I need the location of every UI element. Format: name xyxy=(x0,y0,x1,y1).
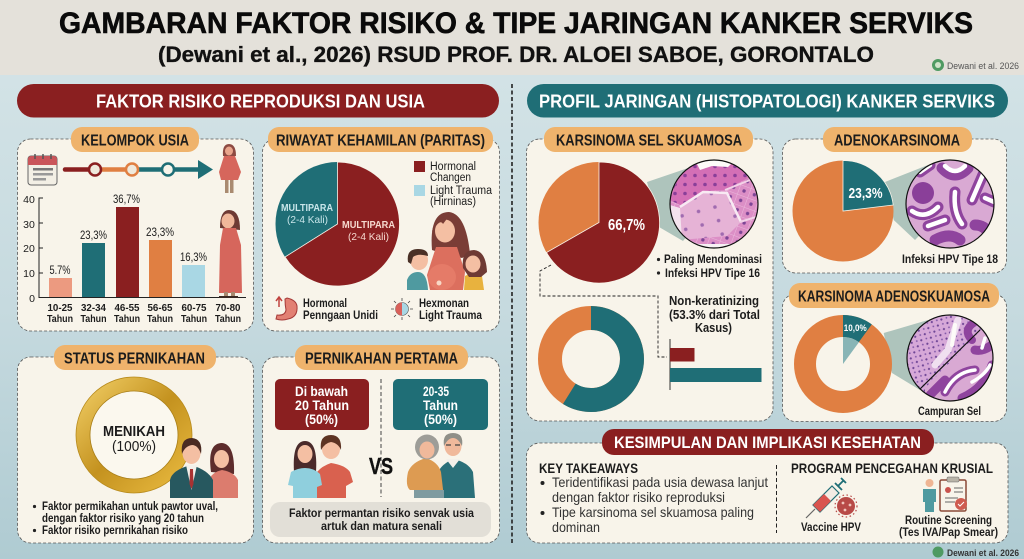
callout wedge xyxy=(885,165,950,240)
bar chart: age groups xyxy=(23,194,246,325)
box: under 20: Di bawah xyxy=(295,383,348,399)
top credit xyxy=(932,59,1019,71)
heading: kesimpulan: KESIMPULAN DAN IMPLIKASI KESEHATAN xyxy=(614,433,921,452)
pie chart: parity: MULTIPARA xyxy=(281,202,333,214)
axis labels xyxy=(23,194,35,305)
column divider xyxy=(511,84,513,543)
heading: skuamosa: KARSINOMA SEL SKUAMOSA xyxy=(556,132,742,150)
illustration: older couple xyxy=(407,433,475,498)
key takeaways: KEY TAKEAWAYS xyxy=(539,460,638,476)
timeline arrow xyxy=(65,160,213,179)
bottom credit: Dewani et al. 2026 xyxy=(947,548,1019,558)
note box: Faktor permantan risiko senvak usia xyxy=(289,506,474,520)
bar categories: 46-55 xyxy=(114,302,140,314)
heading: kelompok usia: KELOMPOK USIA xyxy=(81,132,189,150)
bar categories: Tahun xyxy=(80,313,106,325)
bar values: 23,3% xyxy=(80,230,107,242)
panel: adenoskuamosa xyxy=(782,283,1006,422)
bar categories: Tahun xyxy=(47,313,73,325)
icon: virus xyxy=(835,495,857,517)
mini bar chart xyxy=(670,339,762,390)
box: under 20 xyxy=(275,379,369,430)
caption: hormonal: Penngaan Unidi xyxy=(303,310,378,322)
ring label: MENIKAH xyxy=(103,423,165,440)
illustration: young couple xyxy=(288,435,353,498)
key takeaways: dengan faktor risiko reproduksi xyxy=(552,489,725,505)
box: under 20: (50%) xyxy=(305,411,338,427)
icon: older woman xyxy=(219,210,242,298)
axis labels: 0 xyxy=(29,293,35,305)
notes: status pernikahan: dengan faktor risiko yang 20 tahun xyxy=(42,513,204,525)
bar values: 5.7% xyxy=(50,265,70,277)
pie chart: parity xyxy=(276,162,400,286)
title: GAMBARAN FAKTOR RISIKO & TIPE JARINGAN KANKER SERVIKS xyxy=(59,7,973,40)
panel: pernikahan pertama xyxy=(262,345,500,543)
panel: adenokarsinoma xyxy=(782,127,1006,273)
box: 20-35: 20-35 xyxy=(423,383,449,399)
pie chart: skuamosa xyxy=(538,162,660,283)
bar categories: 56-65 xyxy=(148,302,173,314)
bar categories: 10-25 xyxy=(48,302,73,314)
pie legend: Light Trauma xyxy=(430,185,493,197)
icon: calendar xyxy=(28,154,57,185)
top credit: Dewani et al. 2026 xyxy=(947,61,1019,71)
heading: skuamosa xyxy=(544,127,753,152)
pie chart: adeno xyxy=(792,160,894,262)
bar values xyxy=(50,194,207,277)
icon: stomach xyxy=(276,297,297,320)
label: non-keratinizing: (53.3% dari Total xyxy=(669,307,760,322)
notes: skuamosa: Paling Mendominasi xyxy=(664,254,762,266)
bars xyxy=(49,207,205,297)
pie chart: adeno: 23,3% xyxy=(848,186,883,202)
label: non-keratinizing xyxy=(669,293,760,335)
bottom credit xyxy=(932,546,1019,558)
bar categories: Tahun xyxy=(147,313,173,325)
label: non-keratinizing: Non-keratinizing xyxy=(669,293,759,308)
bar values: 23,3% xyxy=(146,227,174,239)
section heading: left xyxy=(17,84,499,118)
caption: hpv 18: Infeksi HPV Tipe 18 xyxy=(902,254,999,266)
bar categories: Tahun xyxy=(181,313,207,325)
heading: status pernikahan: STATUS PERNIKAHAN xyxy=(64,350,205,368)
caption: screening: Routine Screening xyxy=(905,515,992,527)
icon: gold ring xyxy=(76,377,192,493)
subtitle: (Dewani et al., 2026) RSUD PROF. DR. ALOEI SABOE, GORONTALO xyxy=(158,42,874,67)
key takeaways xyxy=(539,460,768,535)
bar categories: 32-34 xyxy=(81,302,106,314)
key takeaways: Teridentifikasi pada usia dewasa lanjut xyxy=(552,474,768,490)
bar values: 36,7% xyxy=(113,194,140,206)
box: 20-35 xyxy=(393,379,488,430)
panel: kelompok usia xyxy=(18,127,254,331)
caption: screening: (Tes IVA/Pap Smear) xyxy=(899,527,998,539)
notes: skuamosa xyxy=(657,254,762,280)
donut chart: adenoskuamosa xyxy=(805,323,881,402)
caption: vaccine: Vaccine HPV xyxy=(801,522,861,534)
heading: pernikahan pertama: PERNIKAHAN PERTAMA xyxy=(305,350,458,368)
micrograph: mixed tissue xyxy=(907,315,1000,405)
pie chart: parity: (2-4 Kali) xyxy=(348,231,389,243)
heading: kelompok usia xyxy=(71,127,199,152)
axis labels: 20 xyxy=(23,243,35,255)
bar categories: 60-75 xyxy=(182,302,207,314)
icon: syringe xyxy=(806,478,846,518)
caption: light trauma: Hexmonan xyxy=(419,298,469,310)
caption: light trauma xyxy=(419,298,483,322)
chart axes xyxy=(39,198,246,298)
heading: paritas: RIWAYAT KEHAMILAN (PARITAS) xyxy=(276,132,485,150)
section heading: right xyxy=(527,84,1008,118)
illustration: mother and children xyxy=(407,212,487,290)
heading: kesimpulan xyxy=(602,429,934,455)
notes: skuamosa: Infeksi HPV Tipe 16 xyxy=(665,268,760,280)
section heading: left: FAKTOR RISIKO REPRODUKSI DAN USIA xyxy=(96,90,425,112)
bar categories: Tahun xyxy=(215,313,241,325)
notes: status pernikahan: Faktor risiko pernrikahan risiko xyxy=(42,525,188,537)
pie legend: Hormonal xyxy=(430,161,476,173)
pie chart: skuamosa: 66,7% xyxy=(608,217,645,234)
callout wedge xyxy=(884,320,950,390)
caption: hormonal: Hormonal xyxy=(303,298,347,310)
bar categories: Tahun xyxy=(114,313,140,325)
box: 20-35: (50%) xyxy=(424,411,457,427)
bar values: 16,3% xyxy=(180,252,207,264)
icon: young woman xyxy=(219,144,241,193)
panel: status pernikahan xyxy=(18,345,254,543)
heading: adenoskuamosa xyxy=(789,283,999,308)
donut chart: adenoskuamosa: 10,0% xyxy=(844,323,867,333)
box: 20-35: Tahun xyxy=(423,397,458,413)
pie chart: parity: (2-4 Kali) xyxy=(287,214,328,226)
key takeaways: dominan xyxy=(552,519,600,535)
pie legend xyxy=(414,161,493,208)
panel: karsinoma sel skuamosa xyxy=(526,127,773,421)
icon: clipboard xyxy=(940,477,967,511)
notes: status pernikahan xyxy=(33,501,218,537)
pie legend: (Hirninas) xyxy=(430,196,476,208)
pie chart: parity: MULTIPARA xyxy=(342,219,395,231)
heading: status pernikahan xyxy=(54,345,216,370)
illustration: couple xyxy=(170,438,238,498)
ring label: (100%) xyxy=(112,438,156,455)
heading: adenokarsinoma: ADENOKARSINOMA xyxy=(834,132,960,150)
heading: paritas xyxy=(268,127,493,152)
heading: pernikahan pertama xyxy=(295,345,468,370)
note box: artuk dan matura senali xyxy=(321,519,442,533)
label: versus: VS xyxy=(369,453,393,479)
panel: kesimpulan xyxy=(526,429,1008,543)
heading: adenokarsinoma xyxy=(823,127,972,152)
caption: screening xyxy=(899,515,998,539)
label: non-keratinizing: Kasus) xyxy=(695,320,732,335)
axis labels: 10 xyxy=(23,268,35,280)
micrograph: squamous tissue xyxy=(670,160,762,255)
dashed connector xyxy=(540,265,667,357)
box: under 20: 20 Tahun xyxy=(295,397,349,413)
bar categories: 70-80 xyxy=(216,302,241,314)
micrograph: glandular tissue xyxy=(906,160,994,248)
ring label xyxy=(103,423,165,455)
icon: person xyxy=(923,479,936,512)
caption: hormonal xyxy=(303,298,378,322)
panel: riwayat kehamilan xyxy=(262,127,500,331)
bar categories xyxy=(47,302,241,325)
callout wedge xyxy=(647,165,714,241)
icon: light trauma xyxy=(391,298,413,320)
key takeaways: Tipe karsinoma sel skuamosa paling xyxy=(552,504,754,520)
caption: campuran sel: Campuran Sel xyxy=(918,406,981,418)
notes: status pernikahan: Faktor permikahan untuk pawtor uval, xyxy=(42,501,218,513)
pie legend: Changen xyxy=(430,172,471,184)
axis labels: 30 xyxy=(23,219,35,231)
donut chart: non-keratinizing xyxy=(550,318,632,400)
header band xyxy=(0,0,1024,75)
caption: light trauma: Light Trauma xyxy=(419,310,483,322)
axis labels: 40 xyxy=(23,194,35,206)
note box xyxy=(270,502,491,537)
